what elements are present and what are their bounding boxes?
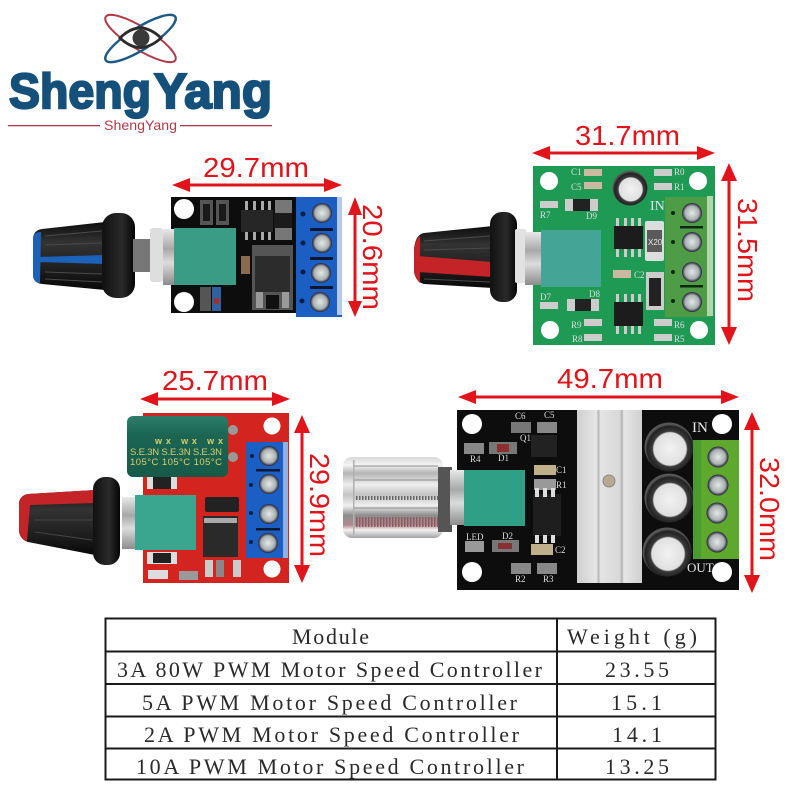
silkscreen labels: C2 (555, 545, 566, 555)
metal knob (343, 457, 452, 538)
dimension: height 32.0mm (744, 412, 785, 593)
silkscreen labels (540, 167, 685, 344)
terminal labels: IN (692, 420, 708, 436)
silkscreen labels: C5 (544, 410, 555, 420)
silkscreen labels: C6 (515, 411, 526, 421)
silkscreen labels: C1 (571, 167, 582, 177)
silkscreen labels: R6 (674, 320, 685, 330)
shaft and washer (515, 229, 542, 285)
shaft (450, 470, 465, 525)
smd parts (464, 422, 561, 574)
header row: Module (292, 624, 369, 649)
silkscreen labels: D8 (589, 289, 600, 299)
dimension: width 49.7mm (458, 363, 739, 404)
silkscreen labels: R1 (674, 182, 685, 192)
module: red knob 5A controller with capacitor (19, 365, 335, 583)
electrolytic capacitor: wx wx wx (154, 436, 223, 446)
silkscreen labels: R7 (540, 210, 551, 220)
mounting holes (540, 172, 708, 339)
silkscreen labels (466, 410, 567, 584)
module: metal knob 10A controller (343, 363, 785, 593)
ic chip (241, 200, 292, 240)
silkscreen labels: R9 (571, 320, 582, 330)
silkscreen labels: LED (466, 532, 484, 542)
pcb board (533, 166, 715, 345)
mounting holes (174, 199, 194, 312)
tagline with rules: ShengYang (104, 117, 177, 133)
silkscreen labels: IN (650, 199, 665, 214)
dimension: height 31.5mm: 31.5mm (732, 198, 763, 302)
potentiometer (464, 470, 525, 526)
heatsink (577, 410, 642, 583)
dimension: height 20.6mm (348, 197, 388, 317)
dimension: width 29.7mm (172, 152, 342, 192)
electrolytic capacitor: 105°C 105°C 105°C (130, 457, 222, 468)
silkscreen labels: R0 (674, 167, 685, 177)
silkscreen labels: Q1 (520, 433, 531, 443)
wordmark: Yang (154, 65, 272, 119)
dimension: width 49.7mm: 49.7mm (557, 363, 663, 394)
silkscreen labels: D7 (540, 292, 551, 302)
terminal block (665, 196, 713, 317)
silkscreen labels: R1 (556, 480, 567, 490)
shaft (122, 497, 136, 549)
row: 3A 80W: 3A 80W PWM Motor Speed Controller (117, 657, 543, 682)
table: module weights (105, 618, 716, 780)
silkscreen labels: D2 (502, 531, 513, 541)
smd parts (200, 200, 250, 311)
ic chips (614, 218, 643, 334)
row: 2A: 14.1 (612, 722, 662, 747)
smd parts (540, 169, 672, 341)
module: red knob 2A controller (414, 120, 763, 345)
mosfet (203, 516, 241, 577)
dimension: height 31.5mm (721, 163, 763, 345)
row: 10A: 13.25 (605, 754, 669, 779)
terminal block (296, 197, 342, 317)
capacitors (642, 422, 694, 576)
dimension: width 25.7mm (140, 365, 290, 406)
mounting holes (462, 414, 732, 582)
terminal labels: OUT (687, 560, 714, 575)
silkscreen labels: C1 (556, 465, 567, 475)
row: 3A 80W: 23.55 (605, 657, 669, 682)
dimension: width 29.7mm: 29.7mm (203, 152, 309, 183)
silkscreen labels: R3 (543, 574, 554, 584)
potentiometer (135, 495, 196, 550)
silkscreen labels: R5 (674, 334, 685, 344)
terminal block (693, 440, 739, 559)
silkscreen labels: C5 (571, 182, 582, 192)
silkscreen labels: X20 (648, 238, 663, 247)
silkscreen labels: R4 (470, 454, 481, 464)
header row: Weight (g) (567, 624, 697, 649)
row: 10A: 10A PWM Motor Speed Controller (136, 754, 525, 779)
shaft and washer (133, 228, 175, 285)
silkscreen labels: C2 (634, 270, 645, 280)
potentiometer (541, 230, 601, 287)
electrolytic capacitor (612, 170, 648, 206)
pcb board (171, 197, 297, 313)
table grid (105, 618, 716, 780)
logo: ShengYang brand mark (8, 7, 272, 133)
dimension: height 29.9mm: 29.9mm (304, 453, 335, 557)
knob (19, 477, 120, 565)
dimension: width 31.7mm: 31.7mm (575, 120, 680, 151)
smd parts (147, 477, 239, 580)
silkscreen labels: R8 (572, 334, 583, 344)
knob (33, 213, 135, 298)
dimension: width 25.7mm: 25.7mm (162, 365, 268, 396)
pcb board (457, 410, 739, 590)
silkscreen labels: D9 (586, 211, 597, 221)
silkscreen labels: R2 (515, 574, 526, 584)
icon: eye with crossed orbits (100, 7, 181, 70)
silkscreen labels: D1 (498, 453, 509, 463)
knob (414, 212, 517, 302)
row: 5A: 5A PWM Motor Speed Controller (142, 690, 518, 715)
potentiometer (174, 228, 236, 285)
header row (292, 624, 697, 649)
electrolytic capacitor (127, 416, 238, 477)
terminal block (246, 442, 288, 558)
pcb board (143, 413, 289, 583)
row: 5A: 15.1 (611, 690, 662, 715)
mosfet (252, 245, 293, 310)
dimension: height 32.0mm: 32.0mm (754, 457, 785, 561)
terminal labels (687, 420, 714, 575)
module: blue knob 5A controller (33, 152, 388, 317)
row: 2A: 2A PWM Motor Speed Controller (144, 722, 520, 747)
wordmark: Sheng (9, 65, 151, 119)
electrolytic capacitor: S.E.3N S.E.3N S.E.3N (130, 447, 222, 458)
dimension: height 20.6mm: 20.6mm (357, 204, 388, 310)
mounting holes (264, 418, 280, 578)
dimension: width 31.7mm (532, 120, 715, 160)
wordmark (9, 65, 272, 119)
dimension: height 29.9mm (294, 415, 335, 583)
